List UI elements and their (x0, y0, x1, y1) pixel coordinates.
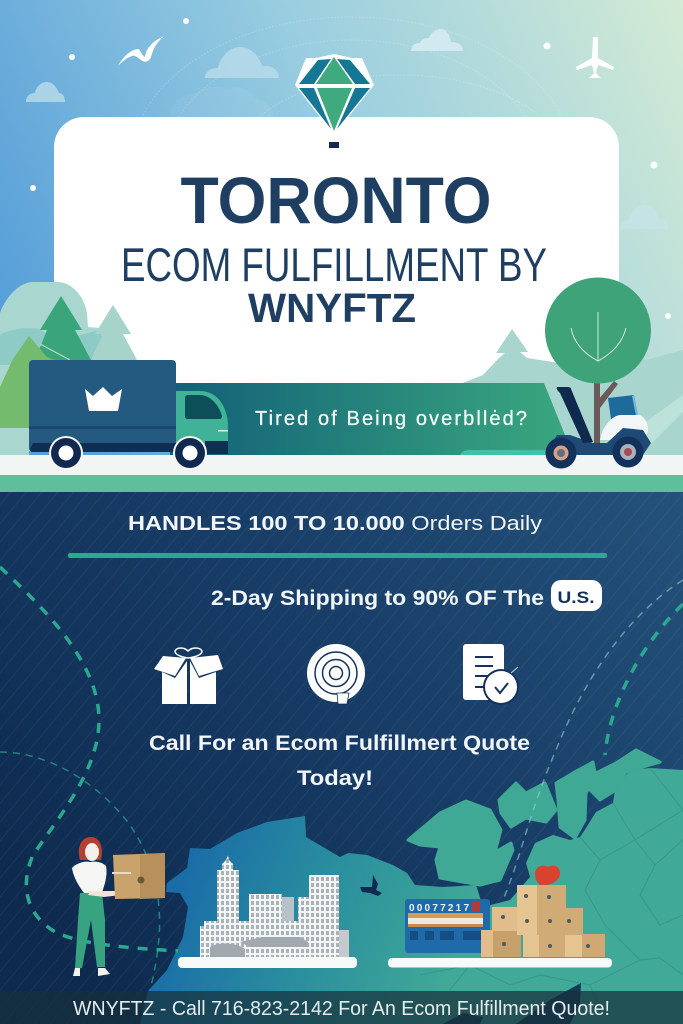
stat: handles orders daily: HANDLES 100 TO 10.000 Orders Daily (128, 513, 542, 535)
right hill and pale tree (460, 329, 683, 455)
left hills and trees (0, 282, 137, 455)
stat: two-day shipping (211, 580, 602, 611)
footer call bar (0, 991, 683, 1024)
sky stars (30, 18, 671, 319)
illustration: woman holding parcel (72, 837, 165, 976)
icon: tractor (546, 387, 651, 468)
banner: tired of being overbilled (170, 383, 567, 455)
icon: delivery truck (29, 360, 228, 470)
illustration: payment card and parcels (388, 866, 612, 968)
icon: airplane (576, 37, 614, 78)
dark lower background (0, 492, 683, 1024)
call to action: Today! (297, 767, 373, 790)
call to action: Call For an Ecom Fulfillmert Quote (149, 732, 530, 755)
stat: two-day shipping: 2-Day Shipping to 90% OF The (211, 587, 544, 610)
stat: two-day shipping: U.S. (558, 588, 594, 607)
illustration: payment card and parcels: 00077217 (409, 903, 469, 914)
map: dark lake (360, 875, 382, 896)
icon: checklist document (463, 644, 519, 705)
road (0, 455, 683, 493)
title: Toronto: TORONTO (180, 163, 492, 237)
icon: diamond balloon logo (295, 54, 374, 148)
icon: target with magnifier handle (307, 644, 365, 704)
dotted globe arcs (132, 17, 572, 303)
illustration: Toronto city skyline (178, 855, 357, 968)
map: dark islands at bottom (443, 983, 581, 1024)
icon: clouds (26, 29, 668, 229)
footer call bar: WNYFTZ - Call 716-823-2142 For An Ecom Fulfillment Quote! (73, 998, 610, 1020)
call to action (149, 732, 530, 790)
map: mainland (140, 768, 683, 1024)
sky background (0, 0, 683, 492)
icon: bird (118, 36, 164, 66)
faint sky swirl clouds (170, 87, 274, 117)
icon: gift box (154, 648, 223, 704)
divider bar (68, 553, 607, 558)
icon: tree (545, 278, 651, 443)
map: country borders (420, 768, 683, 1010)
brand: WNYFTZ: WNYFTZ (248, 285, 416, 331)
banner: tired of being overbilled: Tired of Being overbllėd? (255, 408, 527, 430)
dashed routes (0, 567, 683, 990)
map: islands (408, 750, 660, 885)
title card (54, 117, 619, 407)
subtitle: Ecom Fulfillment By: ECOM FULFILLMENT BY (121, 238, 547, 291)
pale hill highlight (600, 395, 683, 455)
